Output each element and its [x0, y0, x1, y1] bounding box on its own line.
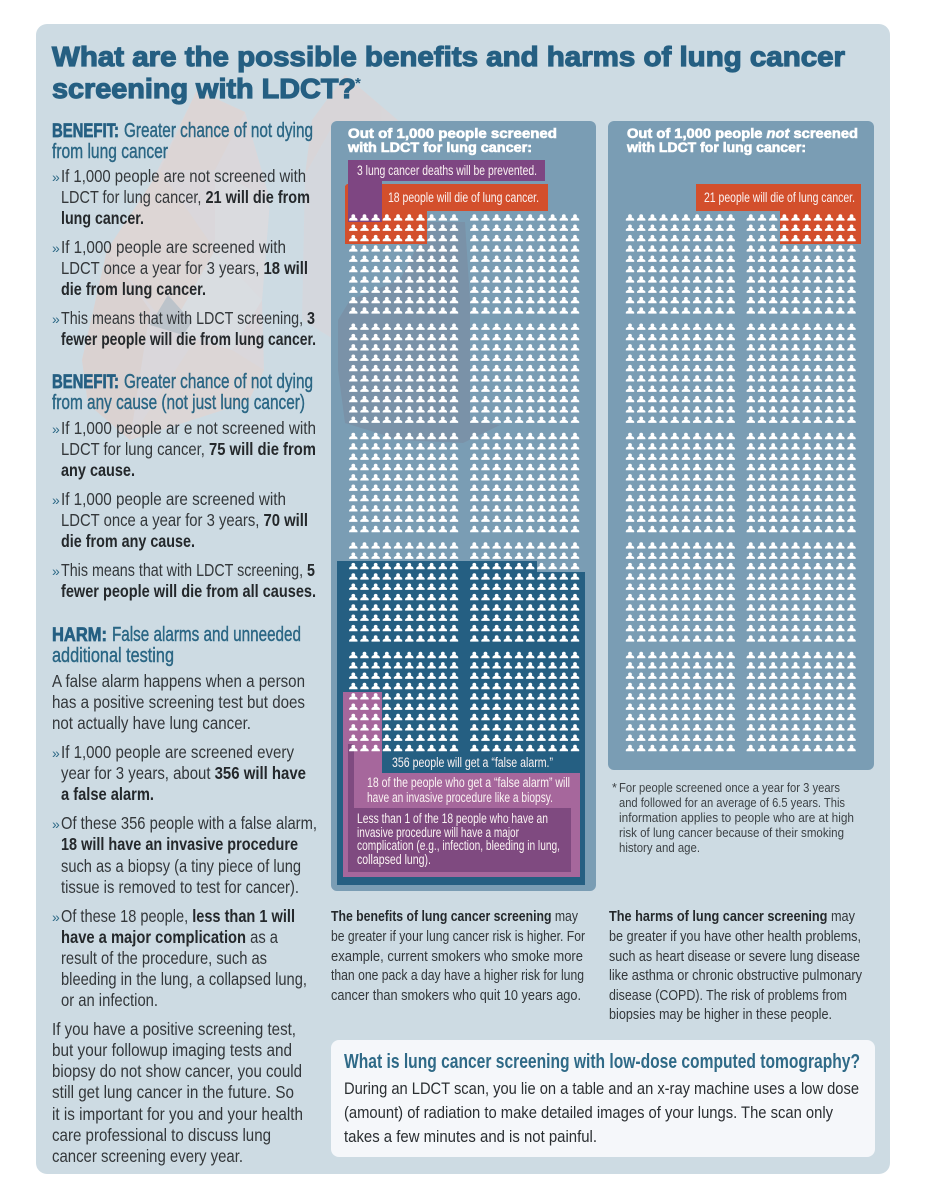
- bullet list: false alarms: a false alarm.: [61, 784, 154, 804]
- text: harms of screening: be greater if you have other health problems,: [609, 929, 861, 945]
- bullet list: false alarms: 18 will have an invasive procedure: [61, 834, 298, 854]
- label: false alarm: 356 people will get a “false alarm.”: [392, 755, 553, 770]
- bullet list: false alarms: Of these 18 people, less than 1 will: [61, 906, 295, 926]
- paragraph: positive screening test: care professional to discuss lung: [52, 1125, 271, 1145]
- pictogram: 500 people: [349, 214, 458, 751]
- pictogram: 500 people: [470, 214, 579, 751]
- bullet list: lung cancer deaths: This means that with LDCT screening, 3: [61, 308, 315, 328]
- text: harms of screening: The harms of lung cancer screening may: [609, 909, 856, 925]
- label: major complication: [357, 811, 560, 867]
- lung illustration background: [82, 75, 400, 440]
- paragraph: false alarm definition: not actually have lung cancer.: [52, 713, 251, 733]
- bullet list: lung cancer deaths: [52, 166, 316, 349]
- bullet list: false alarms: bleeding in the lung, a collapsed lung,: [61, 969, 307, 989]
- paragraph: false alarm definition: has a positive screening test but does: [52, 692, 305, 712]
- heading: harm: additional testing: [52, 645, 174, 667]
- bullet list: false alarms: year for 3 years, about 356 will have: [61, 763, 306, 783]
- label: major complication: invasive procedure will have a major: [357, 825, 519, 840]
- bullet list: all-cause deaths: LDCT once a year for 3 years, 70 will: [61, 510, 308, 530]
- footnote: risk of lung cancer because of their smoking: [619, 826, 844, 840]
- panel heading: Out of 1,000 people not screened: [627, 126, 858, 141]
- panel heading: Out of 1,000 people screened: [348, 126, 557, 141]
- footnote: *: [612, 781, 617, 795]
- title: screening with LDCT?: [52, 73, 356, 104]
- text: benefits of screening: The benefits of lung cancer screening may: [331, 909, 579, 925]
- label: major complication: Less than 1 of the 18 people who have an: [357, 811, 548, 826]
- panel heading: [347, 126, 557, 155]
- bullet list: false alarms: »: [52, 909, 60, 925]
- bullet list: all-cause deaths: »: [52, 563, 60, 579]
- callout body: [344, 1079, 859, 1146]
- heading: benefit any cause: [52, 371, 313, 414]
- heading: harm: False alarms and unneeded: [112, 624, 301, 646]
- bullet list: all-cause deaths: fewer people will die from all causes.: [61, 581, 316, 601]
- bullet list: lung cancer deaths: LDCT for lung cancer, 21 will die from: [61, 187, 310, 207]
- text: harms of screening: biopsies may be higher in these people.: [609, 1007, 832, 1023]
- bullet list: lung cancer deaths: fewer people will die from lung cancer.: [61, 329, 316, 349]
- bullet list: all-cause deaths: If 1,000 people are screened with: [61, 489, 286, 509]
- panel background: [331, 121, 596, 891]
- orange highlight: 18 deaths: [345, 184, 548, 244]
- label: major complication: complication (e.g., infection, bleeding in lung,: [357, 838, 560, 853]
- footnote: For people screened once a year for 3 years: [619, 781, 840, 795]
- footnote: and followed for an average of 6.5 years. This: [619, 796, 845, 810]
- paragraph: positive screening test: cancer screening every year.: [52, 1146, 243, 1166]
- paragraph: positive screening test: If you have a positive screening test,: [52, 1019, 296, 1039]
- heading: benefit any cause: from any cause (not just lung cancer): [52, 392, 305, 414]
- bullet list: all-cause deaths: die from any cause.: [61, 531, 195, 551]
- bullet list: lung cancer deaths: If 1,000 people are screened with: [61, 237, 286, 257]
- orange highlight: 21 deaths: 21 people will die of lung cancer.: [704, 190, 855, 205]
- callout body: takes a few minutes and is not painful.: [344, 1127, 597, 1146]
- footnote: [612, 781, 854, 855]
- paragraph: false alarm definition: [52, 671, 305, 733]
- bullet list: lung cancer deaths: »: [52, 169, 60, 185]
- bullet list: all-cause deaths: LDCT for lung cancer, 75 will die from: [61, 439, 316, 459]
- label: invasive procedure: have an invasive procedure like a biopsy.: [367, 790, 553, 805]
- heading: benefit lung cancer: from lung cancer: [52, 141, 168, 163]
- heading: benefit any cause: Greater chance of not dying: [124, 371, 313, 393]
- pictogram: 500 people: [626, 214, 735, 751]
- text: harms of screening: disease (COPD). The risk of problems from: [609, 988, 847, 1004]
- bullet list: all-cause deaths: [52, 418, 316, 601]
- paragraph: positive screening test: [52, 1019, 303, 1166]
- bullet list: false alarms: or an infection.: [61, 990, 158, 1010]
- paragraph: positive screening test: still get lung cancer in the future. So: [52, 1082, 294, 1102]
- callout body: (amount) of radiation to make detailed images of your lungs. The scan only: [344, 1103, 833, 1122]
- paragraph: positive screening test: biopsy do not show cancer, you could: [52, 1061, 302, 1081]
- bullet list: all-cause deaths: If 1,000 people ar e not screened with: [61, 418, 316, 438]
- bullet list: lung cancer deaths: »: [52, 311, 60, 327]
- bullet list: all-cause deaths: This means that with LDCT screening, 5: [61, 560, 315, 580]
- purple highlight: 3 prevented: 3 lung cancer deaths will be prevented.: [357, 163, 537, 178]
- panel: people screened: [331, 121, 596, 891]
- bullet list: lung cancer deaths: die from lung cancer.: [61, 279, 206, 299]
- bullet list: false alarms: such as a biopsy (a tiny piece of lung: [61, 856, 301, 876]
- footnote: information applies to people who are at high: [619, 811, 854, 825]
- text: harms of screening: like asthma or chronic obstructive pulmonary: [609, 968, 863, 984]
- text: benefits of screening: be greater if your lung cancer risk is higher. For: [331, 929, 585, 945]
- heading: harm: HARM:: [52, 625, 107, 646]
- title: *: [355, 75, 361, 92]
- bullet list: false alarms: »: [52, 816, 60, 832]
- label: invasive procedure: [367, 775, 570, 805]
- pictogram: 500 people: [747, 214, 856, 751]
- bullet list: all-cause deaths: »: [52, 421, 60, 437]
- bullet list: false alarms: have a major complication as a: [61, 927, 278, 947]
- heading: benefit lung cancer: Greater chance of not dying: [124, 120, 313, 142]
- callout body: During an LDCT scan, you lie on a table and an x-ray machine uses a low dose: [344, 1079, 859, 1098]
- orange highlight: 21 deaths: [696, 184, 861, 244]
- panel heading: with LDCT for lung cancer:: [626, 140, 806, 155]
- bullet list: all-cause deaths: »: [52, 492, 60, 508]
- text: benefits of screening: [331, 909, 585, 1004]
- purple highlight: 3 prevented: [348, 160, 545, 222]
- bullet list: false alarms: If 1,000 people are screened every: [61, 742, 294, 762]
- bullet list: false alarms: »: [52, 745, 60, 761]
- dark blue highlight: false alarm: [337, 561, 585, 885]
- lung shadow through panel: [338, 222, 500, 443]
- heading: benefit lung cancer: BENEFIT:: [52, 121, 119, 142]
- text: benefits of screening: example, current smokers who smoke more: [331, 949, 583, 965]
- panel background: [608, 121, 874, 770]
- bullet list: lung cancer deaths: lung cancer.: [61, 208, 144, 228]
- pink highlight: invasive procedure: [343, 692, 580, 877]
- orange highlight: 18 deaths: 18 people will die of lung cancer.: [388, 190, 539, 205]
- paragraph: positive screening test: it is important for you and your health: [52, 1104, 303, 1124]
- heading: harm: [52, 624, 301, 667]
- left column text: [52, 120, 317, 1166]
- paragraph: positive screening test: but your followup imaging tests and: [52, 1040, 292, 1060]
- label: major complication: collapsed lung).: [357, 852, 431, 867]
- panel heading: with LDCT for lung cancer:: [347, 140, 532, 155]
- bullet list: false alarms: result of the procedure, such as: [61, 948, 267, 968]
- bullet list: all-cause deaths: any cause.: [61, 460, 135, 480]
- bullet list: false alarms: tissue is removed to test for cancer).: [61, 877, 299, 897]
- bullet list: false alarms: [52, 742, 317, 1010]
- bullet list: lung cancer deaths: If 1,000 people are not screened with: [61, 166, 306, 186]
- heading: benefit any cause: BENEFIT:: [52, 372, 119, 393]
- bullet list: false alarms: Of these 356 people with a false alarm,: [61, 813, 317, 833]
- panel: people not screened: [608, 121, 874, 770]
- title: [52, 41, 845, 104]
- panel heading: [626, 126, 858, 155]
- text: harms of screening: [609, 909, 863, 1023]
- footnote: history and age.: [619, 841, 700, 855]
- label: invasive procedure: 18 of the people who get a “false alarm” will: [367, 775, 570, 790]
- paragraph: false alarm definition: A false alarm happens when a person: [52, 671, 305, 691]
- text: benefits of screening: than one pack a day have a higher risk for lung: [331, 968, 584, 984]
- heading: benefit lung cancer: [52, 120, 313, 163]
- bullet list: lung cancer deaths: LDCT once a year for 3 years, 18 will: [61, 258, 308, 278]
- text: harms of screening: such as heart disease or severe lung disease: [609, 949, 860, 965]
- callout: what is LDCT: [331, 1040, 875, 1157]
- text: benefits of screening: cancer than smokers who quit 10 years ago.: [331, 988, 581, 1004]
- title: What are the possible benefits and harms of lung cancer: [52, 41, 845, 72]
- dark purple highlight: major complication: [348, 744, 571, 872]
- bullet list: lung cancer deaths: »: [52, 240, 60, 256]
